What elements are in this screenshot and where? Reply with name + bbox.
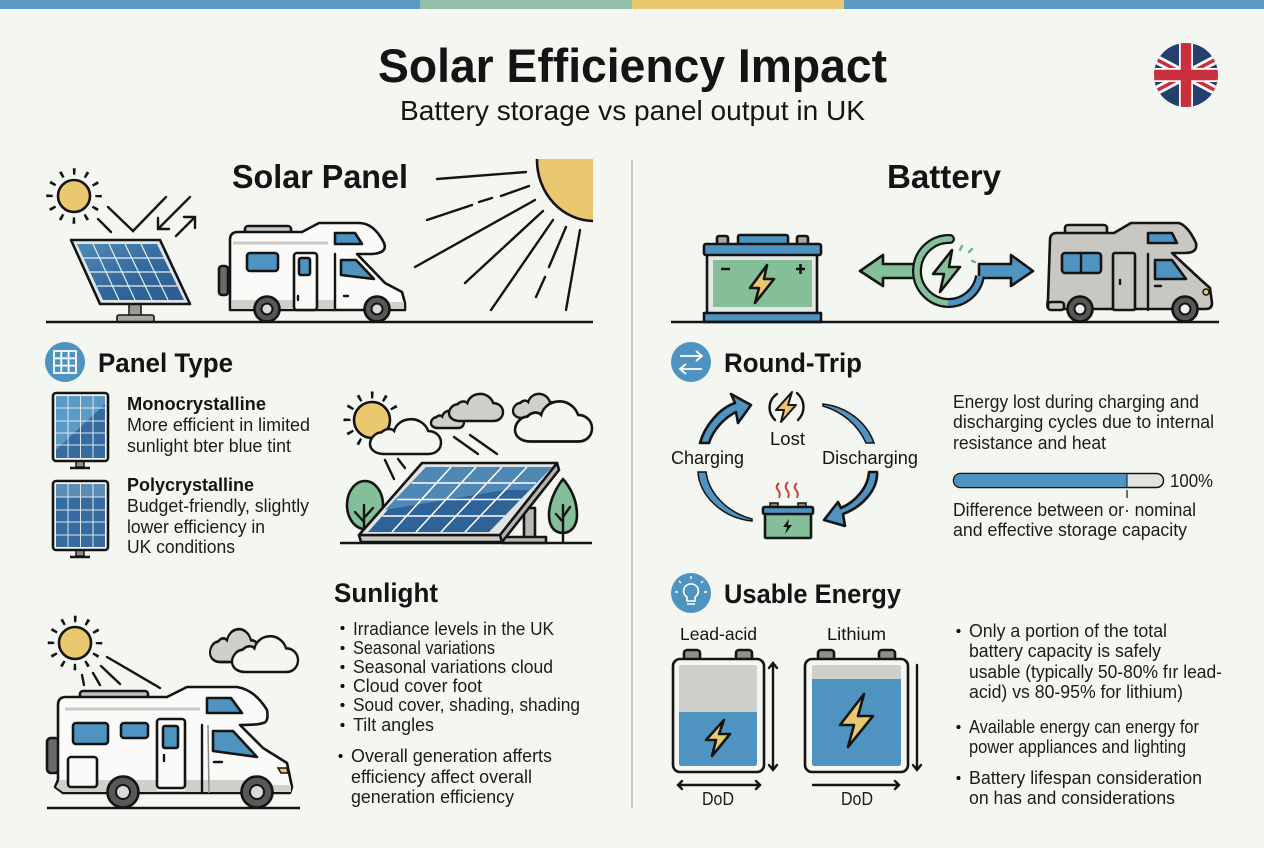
list: sunlight factors: Seasonal variations cloud [353, 656, 553, 677]
panel: sunlight [334, 578, 580, 807]
heading: solar panel: Solar Panel [232, 158, 408, 195]
label: charging: Charging [671, 447, 744, 468]
icon: bulb badge [671, 573, 711, 613]
text: capacity difference [953, 499, 1196, 540]
text: polycrystalline: lower efficiency in [127, 516, 265, 537]
text: available energy: Available energy can energy for [969, 716, 1199, 737]
text: overall generation [338, 745, 552, 807]
text: battery lifespan [956, 767, 1202, 808]
heading: panel type: Panel Type [98, 348, 233, 378]
panel: round-trip [671, 342, 1214, 540]
text: capacity difference: Difference between or· nominal [953, 499, 1196, 520]
icon: small sun [50, 172, 98, 220]
heading: usable energy: Usable Energy [724, 579, 901, 609]
heading: sunlight: Sunlight [334, 578, 438, 608]
arrow: discharging upper [823, 404, 874, 443]
list: sunlight factors: Cloud cover foot [353, 675, 483, 696]
heading: battery: Battery [887, 158, 1002, 195]
text: energy lost: discharging cycles due to internal [953, 411, 1214, 432]
text: battery lifespan: Battery lifespan consideration [969, 767, 1202, 788]
icon: car battery [704, 235, 821, 322]
label: lost: Lost [770, 428, 805, 449]
icon: large campervan [47, 687, 292, 808]
list: sunlight factors [340, 618, 580, 735]
text: energy lost: Energy lost during charging and [953, 391, 1199, 412]
icon: campervan grey [1047, 223, 1212, 322]
text: polycrystalline: UK conditions [127, 536, 235, 557]
icon: trees [347, 479, 577, 543]
text: overall generation: efficiency affect overall [351, 766, 532, 787]
chart: capacity bar: 100% [1170, 470, 1213, 491]
label: discharging: Discharging [822, 447, 918, 468]
title: Solar Efficiency Impact [378, 39, 887, 92]
diagram: charge cycle [671, 392, 918, 538]
text: monocrystalline: Monocrystalline [127, 393, 266, 414]
text: monocrystalline: More efficient in limited [127, 414, 310, 435]
text: usable capacity [956, 620, 1222, 702]
icon: campervan white [219, 223, 405, 322]
text: capacity difference: and effective storage capacity [953, 519, 1188, 540]
text: overall generation: Overall generation afferts [351, 745, 552, 766]
icon: large sun with rays [414, 159, 593, 312]
icon: polycrystalline panel [53, 481, 108, 557]
icon: lithium battery: DoD [841, 788, 873, 809]
icon: lead-acid battery: Lead-acid [680, 624, 757, 644]
panel: battery column header [704, 158, 1212, 322]
subtitle: Battery storage vs panel output in UK [400, 95, 866, 126]
icon: lithium battery: Lithium [827, 624, 886, 644]
list: sunlight factors: Soud cover, shading, shading [353, 694, 580, 715]
icon: sun behind cloud [347, 395, 441, 454]
icon: clouds [210, 629, 298, 672]
icon: lost energy bolt [770, 392, 804, 422]
text: usable capacity: acid) vs 80-95% for lithium) [969, 681, 1183, 702]
chart: capacity bar [954, 470, 1213, 498]
text: available energy: power appliances and lighting [969, 736, 1186, 757]
illustration: panel under clouds [340, 394, 592, 543]
ground line left [46, 321, 593, 323]
text: usable capacity: battery capacity is safely [969, 640, 1162, 661]
text: monocrystalline: sunlight bter blue tint [127, 435, 292, 456]
arrow: charging lower [698, 472, 752, 521]
icon: tilted array [359, 463, 559, 543]
text: battery lifespan: on has and considerations [969, 787, 1175, 808]
text: polycrystalline: Polycrystalline [127, 474, 254, 495]
icon: lead-acid battery [673, 624, 777, 809]
icon: grey clouds [431, 394, 503, 428]
arrow: charging upper [700, 394, 751, 443]
icon: UK flag [1154, 43, 1218, 107]
arrow: discharging lower [824, 472, 877, 526]
heading: round-trip: Round-Trip [724, 348, 862, 378]
text: polycrystalline: Budget-friendly, slightly [127, 495, 310, 516]
list: sunlight factors: Seasonal variations [353, 637, 495, 658]
column divider [631, 160, 633, 808]
text: polycrystalline [127, 474, 310, 557]
icon: reflected rays and arrows [98, 197, 195, 236]
icon: grid badge [45, 342, 85, 382]
icon: monocrystalline panel [53, 393, 108, 468]
ground line right [671, 321, 1219, 323]
text: monocrystalline [127, 393, 310, 456]
rays through clouds [385, 435, 497, 479]
icon: right cloud pair [513, 394, 592, 442]
text: energy lost [953, 391, 1214, 453]
panel: panel type [45, 342, 592, 557]
list: sunlight factors: Irradiance levels in the UK [353, 618, 554, 639]
icon: heating battery [763, 482, 813, 538]
text: usable capacity: Only a portion of the total [969, 620, 1167, 641]
icon: lithium battery [805, 624, 921, 809]
list: sunlight factors: Tilt angles [353, 714, 434, 735]
icon: swap badge [671, 342, 711, 382]
text: overall generation: generation efficiency [351, 786, 515, 807]
icon: lead-acid battery: DoD [702, 788, 734, 809]
icon: sun with rays [51, 619, 160, 688]
panel: solar panel column header [46, 159, 593, 321]
text: available energy [956, 716, 1199, 757]
top colour bar [0, 0, 1264, 9]
panel: usable energy [671, 573, 1222, 809]
icon: bidirectional energy arrows [860, 239, 1033, 303]
text: usable capacity: usable (typically 50-80% fır lead- [969, 661, 1222, 682]
text: energy lost: resistance and heat [953, 432, 1107, 453]
illustration: campervan under sun [47, 619, 300, 808]
icon: tilted solar panel [71, 240, 190, 322]
